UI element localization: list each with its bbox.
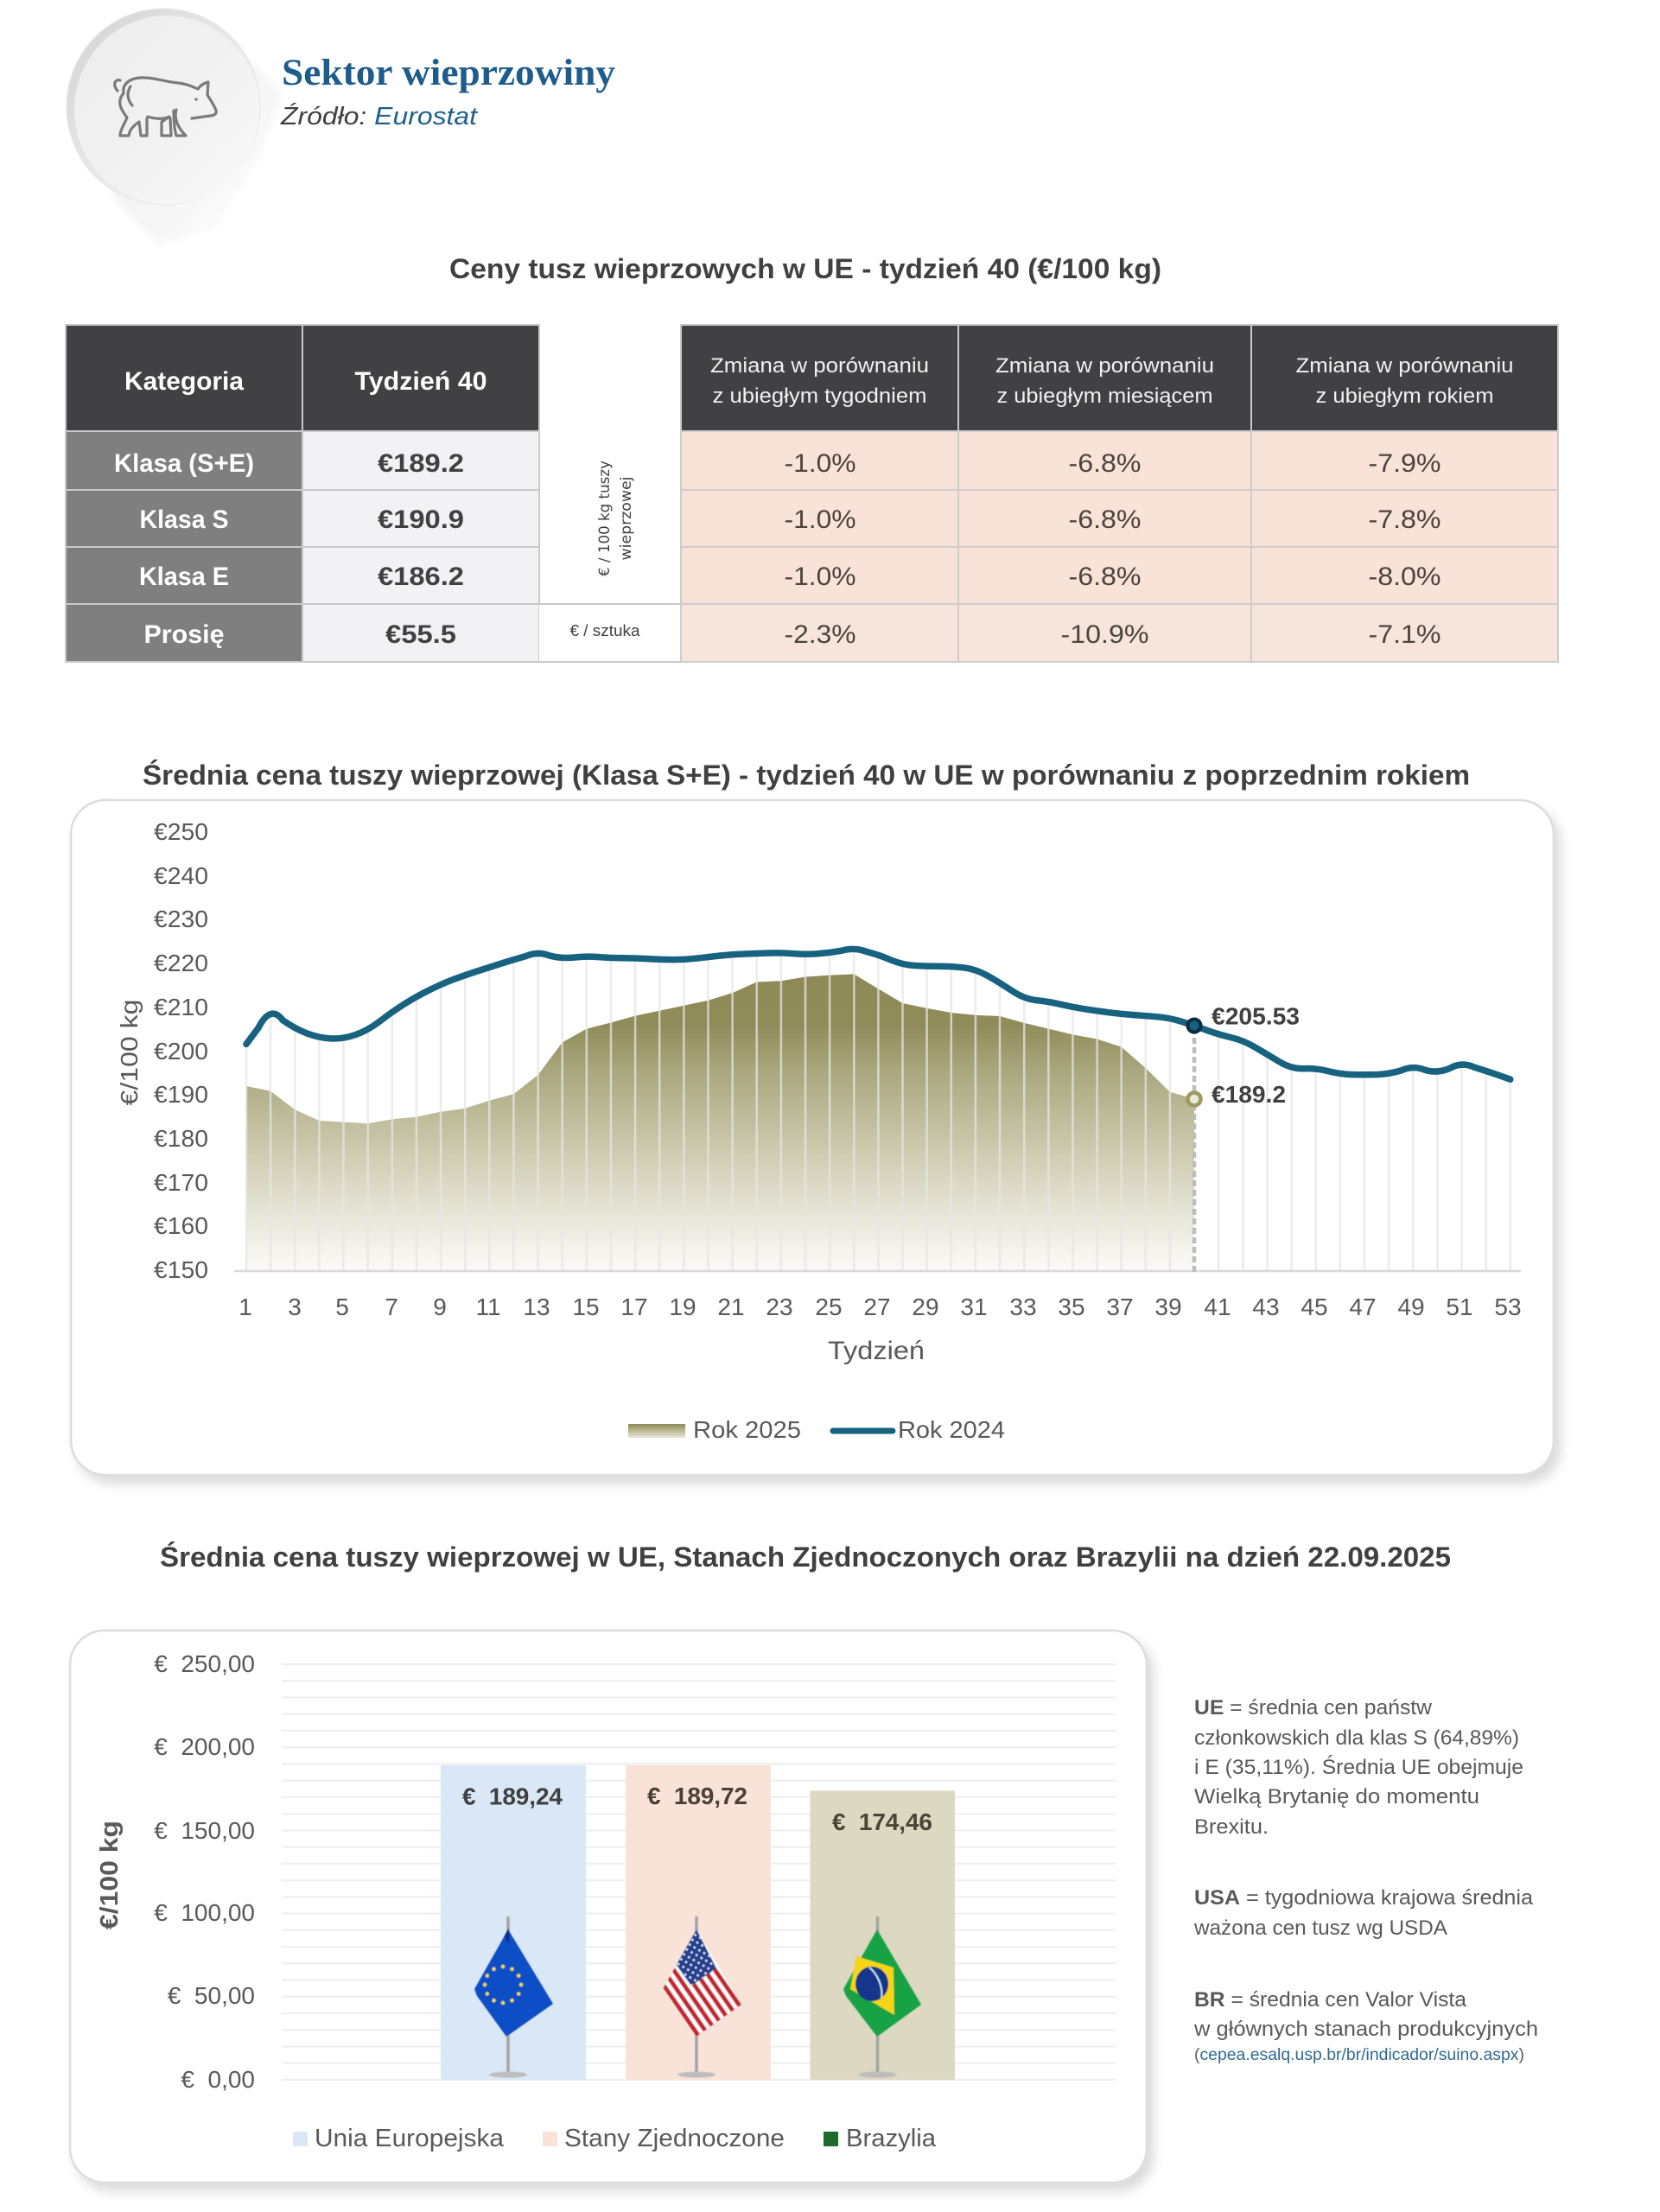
- note: USA: ważona cen tusz wg USDA: [1193, 1916, 1448, 1940]
- note: EU: UE = średnia cen państw: [1194, 1696, 1432, 1719]
- y axis labels: € 250,00: [154, 1650, 255, 1677]
- x axis labels: 27: [863, 1294, 891, 1320]
- table header labels: z ubiegłym rokiem: [1315, 385, 1493, 408]
- x axis labels: 3: [288, 1294, 302, 1320]
- x axis labels: 33: [1009, 1294, 1037, 1320]
- bar: USA: € 189,72: [647, 1783, 747, 1809]
- note: EU: Wielką Brytanię do momentu: [1194, 1785, 1479, 1808]
- panel: weekly price chart: [71, 800, 1554, 1475]
- legend: [628, 1416, 1005, 1443]
- percentage changes: [785, 449, 1441, 649]
- row labels: Klasa E: [139, 563, 229, 591]
- note: Brazil: [1193, 1988, 1538, 2064]
- data label: 189.2: €189.2: [1212, 1081, 1286, 1108]
- y axis labels: €250: [154, 818, 208, 845]
- panel: price comparison bar chart: [70, 1630, 1147, 2183]
- source line: Źródło: Eurostat: [280, 102, 479, 130]
- panel card: [71, 800, 1554, 1475]
- table header labels: Zmiana w porównaniu: [1296, 354, 1514, 378]
- x axis labels: 31: [960, 1294, 988, 1320]
- y axis labels: €180: [154, 1125, 208, 1152]
- unit label: per 100 kg: € / 100 kg tuszy: [596, 461, 614, 576]
- x axis labels: 1: [239, 1294, 252, 1320]
- unit label: per piece: € / sztuka: [570, 622, 641, 639]
- y axis labels: € 100,00: [154, 1899, 255, 1926]
- percentage changes: -6.8%: [1068, 449, 1141, 478]
- heading: line chart: Średnia cena tuszy wieprzowej (Klasa S+E) - tydzień 40 w UE w porównaniu z poprzednim rokiem: [143, 760, 1470, 791]
- percentage changes: -7.9%: [1369, 449, 1441, 478]
- legend: Rok 2024: [898, 1416, 1005, 1443]
- week 40 values: €190.9: [378, 505, 464, 534]
- percentage changes: -1.0%: [785, 505, 855, 534]
- percentage changes: -8.0%: [1369, 563, 1441, 591]
- percentage changes: -6.8%: [1068, 563, 1141, 591]
- y axis labels: €240: [154, 862, 208, 889]
- y axis title: €/100 kg: [96, 1821, 124, 1929]
- row labels: [114, 449, 254, 649]
- y axis labels: €160: [154, 1212, 208, 1239]
- x axis labels: [239, 1294, 1522, 1320]
- week 40 dashed marker line: [1193, 1028, 1196, 1273]
- icon: EU table flag: [474, 1916, 553, 2077]
- x axis labels: 23: [766, 1294, 793, 1320]
- panel card: [70, 1630, 1147, 2183]
- legend: Brazylia: [846, 2125, 937, 2152]
- table header labels: [124, 354, 1514, 408]
- y axis labels: [154, 1650, 255, 2093]
- x axis labels: 7: [385, 1294, 398, 1320]
- y axis labels: [154, 818, 208, 1283]
- table week 40 cells: [302, 431, 539, 662]
- y axis labels: €230: [154, 906, 208, 932]
- icon: US table flag: [663, 1916, 741, 2078]
- note: EU: członkowskich dla klas S (64,89%): [1194, 1726, 1519, 1750]
- row labels: Klasa S: [140, 505, 228, 534]
- table: carcass prices: [66, 325, 1558, 662]
- note: Brazil: BR = średnia cen Valor Vista: [1194, 1988, 1466, 2012]
- y axis title: €/100 kg: [116, 999, 143, 1106]
- x axis labels: 35: [1058, 1294, 1085, 1320]
- x axis labels: 13: [523, 1294, 550, 1320]
- x axis labels: 5: [335, 1294, 349, 1320]
- week 40 values: €186.2: [378, 563, 464, 591]
- x axis labels: 49: [1397, 1294, 1425, 1320]
- x axis labels: 39: [1154, 1294, 1182, 1320]
- note: EU: Brexitu.: [1194, 1815, 1269, 1839]
- table header labels: Zmiana w porównaniu: [995, 354, 1214, 378]
- bar: USA: [626, 1765, 771, 2080]
- percentage changes: -1.0%: [785, 563, 855, 591]
- x axis labels: 41: [1204, 1294, 1231, 1320]
- legend: Stany Zjednoczone: [564, 2125, 785, 2152]
- percentage changes: -10.9%: [1061, 620, 1149, 649]
- marker: 2025 week 40: [1187, 1092, 1201, 1106]
- table unit cell outline: [539, 604, 681, 662]
- table header labels: Kategoria: [124, 367, 244, 396]
- y axis labels: € 200,00: [154, 1733, 255, 1760]
- y axis labels: €150: [154, 1256, 208, 1283]
- week 40 values: €189.2: [378, 449, 464, 478]
- bar: Brazil: € 174,46: [832, 1808, 932, 1835]
- row labels: Prosię: [143, 620, 225, 649]
- x axis labels: 11: [475, 1294, 501, 1320]
- table category cells: [66, 431, 302, 662]
- percentage changes: -2.3%: [785, 620, 855, 649]
- heading: bar chart: Średnia cena tuszy wieprzowej w UE, Stanach Zjednoczonych oraz Brazylii na dzień 22.09.2025: [160, 1541, 1451, 1573]
- note: USA: [1193, 1886, 1533, 1940]
- y axis labels: € 150,00: [154, 1817, 255, 1844]
- x axis labels: 29: [912, 1294, 939, 1320]
- drop lines: [246, 949, 1511, 1271]
- bar: EU: € 189,24: [462, 1783, 563, 1809]
- bar: Brazil: [811, 1790, 955, 2080]
- data label: 205.53: €205.53: [1212, 1002, 1300, 1030]
- icon: Brazil table flag: [843, 1916, 921, 2077]
- unit label: per 100 kg: wieprzowej: [618, 476, 635, 561]
- week 40 values: €55.5: [385, 620, 456, 649]
- percentage changes: -6.8%: [1068, 505, 1141, 534]
- legend: Rok 2025: [693, 1416, 801, 1443]
- percentage changes: -7.8%: [1369, 505, 1441, 534]
- icon: pig medallion: [67, 9, 283, 246]
- x axis labels: 37: [1106, 1294, 1134, 1320]
- note: USA: USA = tygodniowa krajowa średnia: [1194, 1886, 1533, 1910]
- y axis labels: €210: [154, 994, 208, 1020]
- marker: 2024 week 40: [1187, 1020, 1201, 1032]
- grid lines: [282, 1664, 1116, 2080]
- notes: data definitions: [1193, 1696, 1538, 2064]
- note: Brazil: w głównych stanach produkcyjnych: [1193, 2018, 1538, 2041]
- y axis labels: €190: [154, 1081, 208, 1108]
- x axis line: [234, 1270, 1521, 1272]
- unit label: per 100 kg: [596, 461, 635, 576]
- percentage changes: -7.1%: [1369, 620, 1441, 649]
- y axis labels: €200: [154, 1038, 208, 1065]
- week 40 values: [378, 449, 464, 649]
- note: EU: [1194, 1696, 1523, 1839]
- row labels: Klasa (S+E): [114, 449, 254, 478]
- table header labels: Zmiana w porównaniu: [710, 354, 929, 378]
- legend: Unia Europejska: [315, 2125, 505, 2152]
- table change cells: [681, 431, 1558, 662]
- x axis labels: 21: [717, 1294, 745, 1320]
- x axis labels: 25: [815, 1294, 843, 1320]
- bar: EU: [441, 1765, 586, 2080]
- title: Sektor wieprzowiny: Sektor wieprzowiny: [282, 53, 616, 93]
- note: Brazil: (cepea.esalq.usp.br/br/indicador/suino.aspx ): [1194, 2046, 1524, 2064]
- table header labels: z ubiegłym miesiącem: [997, 385, 1213, 408]
- x axis labels: 51: [1446, 1294, 1473, 1320]
- x axis labels: 43: [1252, 1294, 1280, 1320]
- y axis labels: €170: [154, 1169, 208, 1196]
- x axis labels: 15: [572, 1294, 600, 1320]
- note: EU: i E (35,11%). Średnia UE obejmuje: [1194, 1755, 1523, 1779]
- percentage changes: -1.0%: [785, 449, 855, 478]
- x axis labels: 17: [620, 1294, 648, 1320]
- line: year 2024: [246, 949, 1511, 1079]
- x axis labels: 45: [1301, 1294, 1328, 1320]
- x axis labels: 9: [433, 1294, 447, 1320]
- x axis labels: 19: [669, 1294, 696, 1320]
- table header labels: z ubiegłym tygodniem: [712, 385, 926, 408]
- x axis labels: 53: [1494, 1294, 1522, 1320]
- y axis labels: €220: [154, 950, 208, 976]
- table header labels: Tydzień 40: [354, 367, 487, 396]
- legend: [293, 2125, 937, 2152]
- table header row: [66, 325, 1558, 431]
- x axis title: Tydzień: [828, 1337, 925, 1365]
- x axis labels: 47: [1349, 1294, 1377, 1320]
- heading: price table: Ceny tusz wieprzowych w UE - tydzień 40 (€/100 kg): [449, 253, 1161, 284]
- y axis labels: € 50,00: [168, 1982, 255, 2009]
- area: year 2025: [246, 974, 1194, 1271]
- y axis labels: € 0,00: [181, 2066, 255, 2093]
